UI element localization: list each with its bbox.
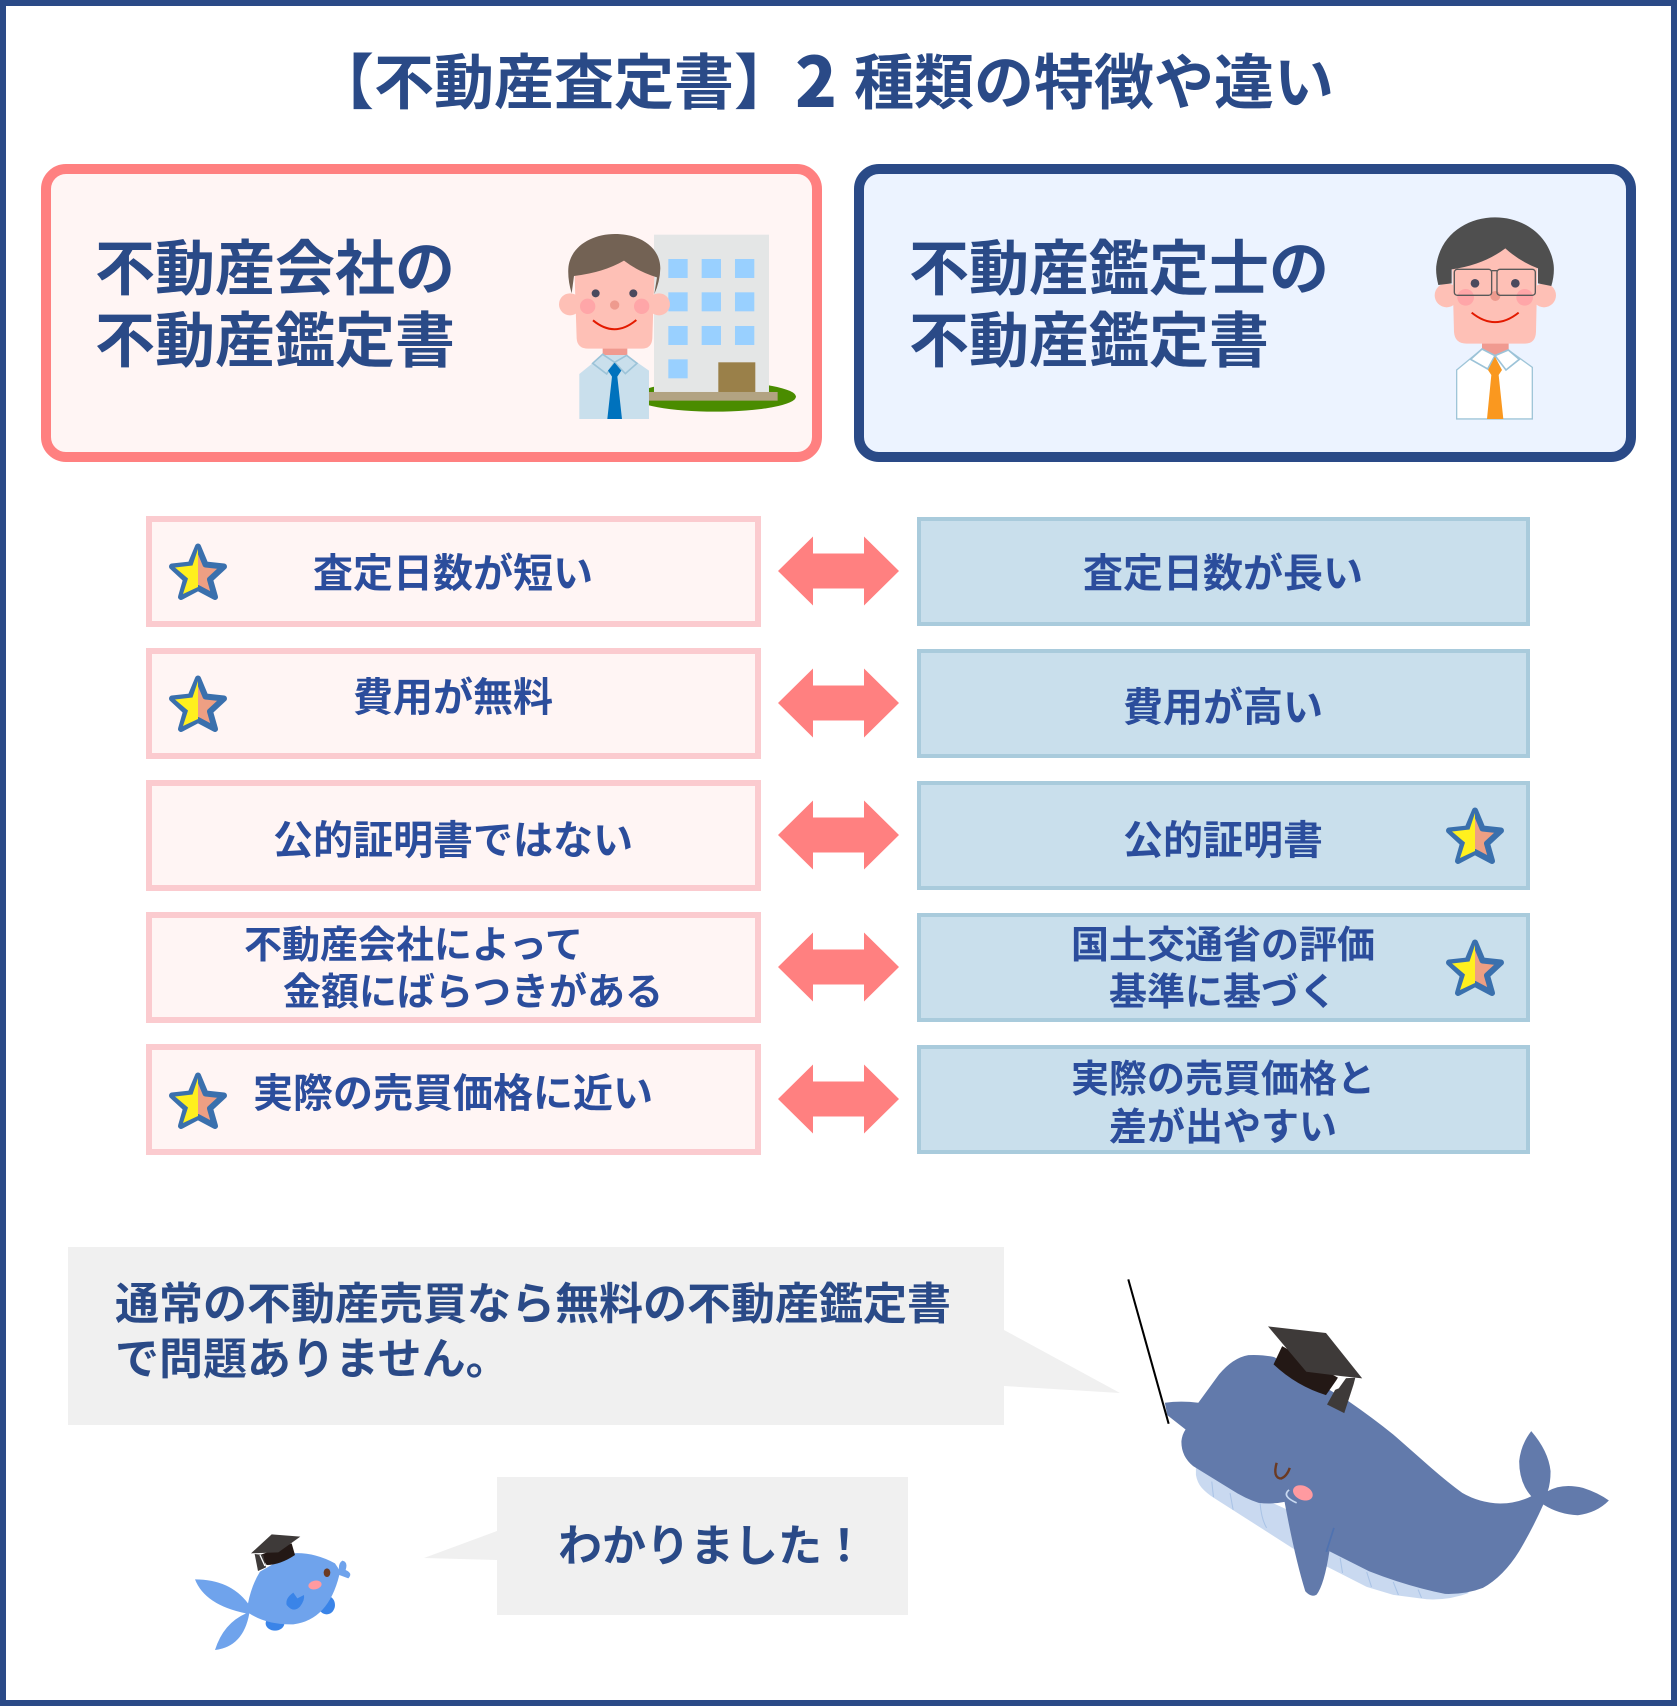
left box: varies by company: 金額にばらつきがある [283,972,663,1014]
arrow [778,668,899,738]
left box: free [149,651,758,756]
left box: close to market price: 実際の売買価格に近い [253,1072,653,1116]
right box: may differ from market price: 実際の売買価格と [1071,1059,1375,1101]
heading: real estate company appraisal [95,236,455,375]
left box: free: 費用が無料 [353,676,553,720]
heading: real estate company appraisal: 不動産会社の [95,236,455,303]
right box: may differ from market price [919,1047,1528,1152]
title: 【不動産査定書】 [314,50,794,117]
row 5: market price [149,1047,1528,1152]
callout: teacher whale: 通常の不動産売買なら無料の不動産鑑定書 [115,1280,951,1329]
right box: official [919,783,1528,888]
heading: certified appraiser appraisal [909,236,1329,375]
arrow [778,932,899,1002]
heading: certified appraiser appraisal: 不動産鑑定士の [909,236,1329,303]
right box: expensive: 費用が高い [1123,686,1323,730]
title: 種類の特徴や違い [854,50,1334,117]
right box: long appraisal: 査定日数が長い [1083,552,1363,596]
arrow [778,536,899,606]
row 2: cost [149,651,1528,756]
callout: small whale: わかりました！ [558,1522,866,1571]
left box: varies by company: 不動産会社によって [244,925,583,967]
callout: teacher whale: で問題ありません。 [115,1335,510,1384]
panel: certified appraiser [859,169,1631,457]
left box: close to market price [149,1047,758,1152]
panel: real estate company [46,169,817,457]
left box: not official [149,783,758,888]
callout: small whale [424,1477,908,1615]
icon: teacher whale with pointer [1128,1279,1609,1599]
right box: long appraisal [919,519,1528,624]
row 1: appraisal days [149,519,1528,624]
heading: certified appraiser appraisal: 不動産鑑定書 [909,308,1269,375]
arrow [778,1064,899,1134]
heading: real estate company appraisal: 不動産鑑定書 [95,308,455,375]
left box: not official: 公的証明書ではない [273,819,633,863]
left box: short appraisal: 査定日数が短い [313,552,593,596]
left box: short appraisal [149,519,758,624]
icon: appraiser with glasses [1435,217,1556,419]
icon: salesman and building [559,234,796,419]
icon: small whale [195,1534,350,1650]
callout: teacher whale [68,1247,1120,1425]
right box: ministry standards: 国土交通省の評価 [1071,925,1375,967]
title: 2 [795,27,837,127]
right box: expensive [919,651,1528,756]
row 3: official certificate [149,783,1528,888]
row 4: valuation basis [149,915,1528,1020]
title [314,27,1334,127]
right box: may differ from market price: 差が出やすい [1109,1107,1337,1149]
right box: official: 公的証明書 [1123,819,1323,863]
right box: ministry standards: 基準に基づく [1109,972,1337,1014]
arrow [778,800,899,870]
left box: varies by company [149,915,758,1020]
right box: ministry standards [919,915,1528,1020]
